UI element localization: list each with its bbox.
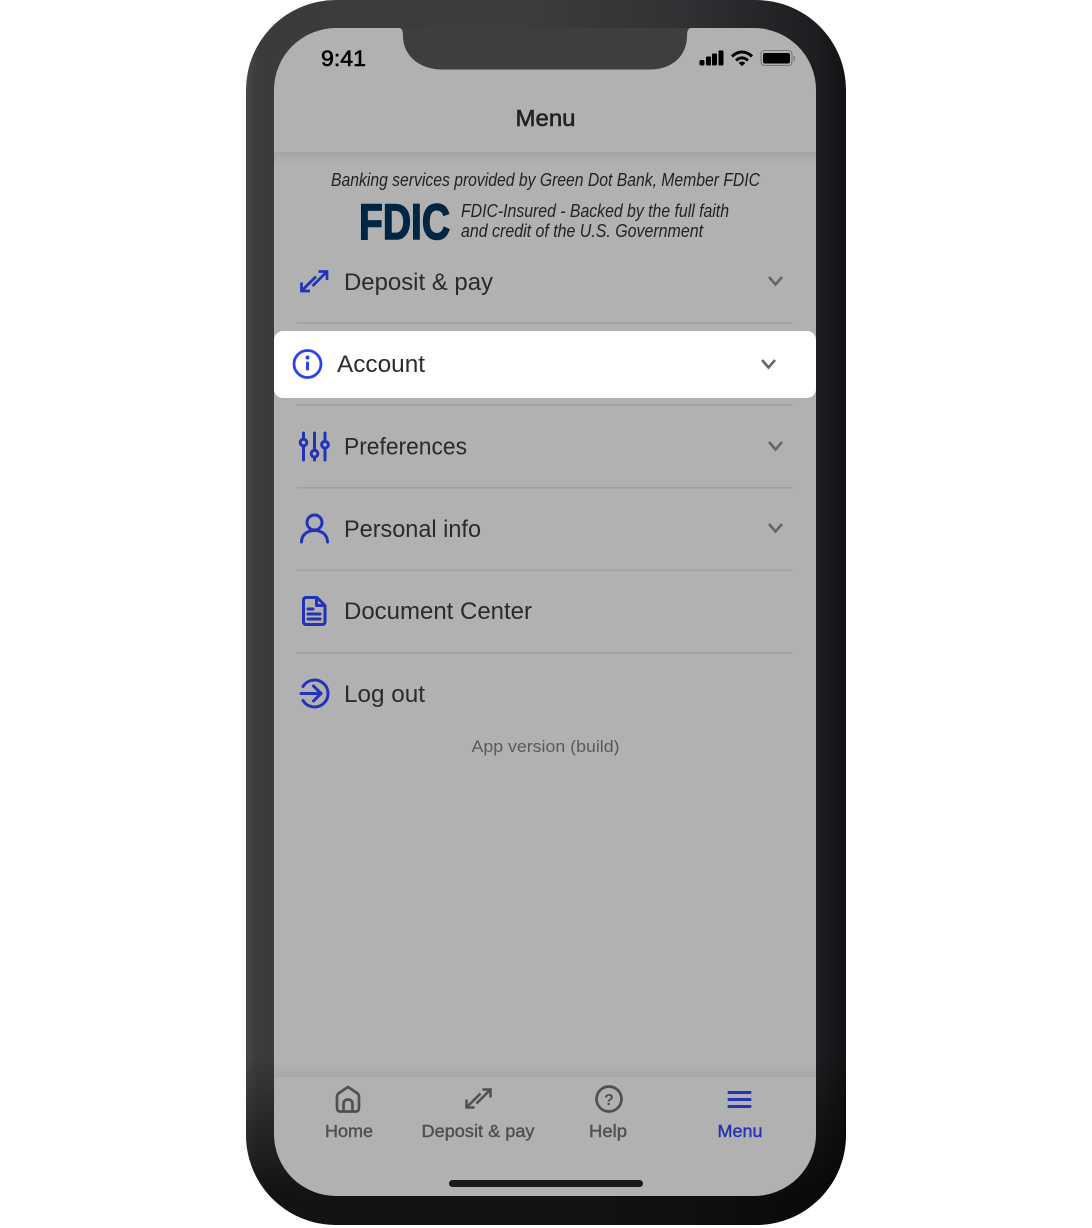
menu row: Deposit & pay: Deposit & pay (344, 269, 493, 296)
FDIC insured statement: and credit of the U.S. Government (461, 221, 704, 241)
icon: wifi (732, 52, 752, 66)
icon: battery (761, 50, 795, 66)
icon: cellular signal (700, 50, 724, 66)
icon: person (302, 515, 328, 542)
tab: Home: Home (325, 1121, 373, 1141)
menu row: Account (highlighted) (274, 331, 816, 398)
bank disclosure text: Banking services provided by Green Dot Bank, Member FDIC (331, 170, 761, 190)
icon: help: ? (604, 1092, 614, 1109)
status bar icons (700, 50, 795, 66)
heading: Menu: Menu (516, 105, 576, 131)
menu row: Preferences (300, 433, 782, 460)
app version text: App version (build) (472, 737, 620, 756)
icon: chevron (769, 277, 782, 284)
tab: Deposit & pay (422, 1090, 535, 1141)
menu row: Log out (301, 680, 425, 708)
menu row: Personal info: Personal info (344, 516, 481, 543)
tab: Menu (active): Menu (718, 1121, 762, 1141)
menu row: Document Center: Document Center (344, 598, 532, 625)
icon: sliders (300, 433, 328, 460)
tab: Home (325, 1087, 373, 1141)
icon: chevron (762, 360, 775, 368)
tab: Help (589, 1086, 627, 1141)
icon: chevron (769, 524, 782, 532)
phone frame (246, 0, 846, 1225)
icon: hamburger (728, 1091, 752, 1108)
icon: document (304, 598, 325, 624)
home indicator (449, 1180, 643, 1187)
icon: log out (301, 680, 328, 707)
notch (400, 28, 690, 70)
icon: deposit arrows (302, 272, 327, 291)
FDIC insured statement: FDIC-Insured - Backed by the full faith (461, 201, 729, 221)
tab bar (325, 1086, 762, 1141)
menu row: Preferences: Preferences (344, 434, 467, 460)
icon: info (294, 350, 321, 378)
icon: chevron (769, 442, 782, 450)
menu row: Personal info (302, 515, 782, 543)
menu row: Deposit & pay (302, 269, 782, 296)
status bar time: 9:41 (321, 46, 366, 71)
menu row: Account (highlighted): Account (337, 351, 425, 378)
FDIC logo: FDIC (359, 194, 450, 250)
phone screen (274, 28, 816, 1196)
menu row: Log out: Log out (344, 681, 425, 708)
tab: Deposit & pay: Deposit & pay (422, 1121, 535, 1141)
divider lines (297, 322, 793, 654)
icon: deposit arrows (466, 1090, 490, 1108)
tab: Menu (active) (718, 1091, 762, 1141)
tab: Help: Help (589, 1121, 627, 1141)
FDIC insured statement (461, 201, 729, 241)
icon: home (337, 1087, 359, 1112)
